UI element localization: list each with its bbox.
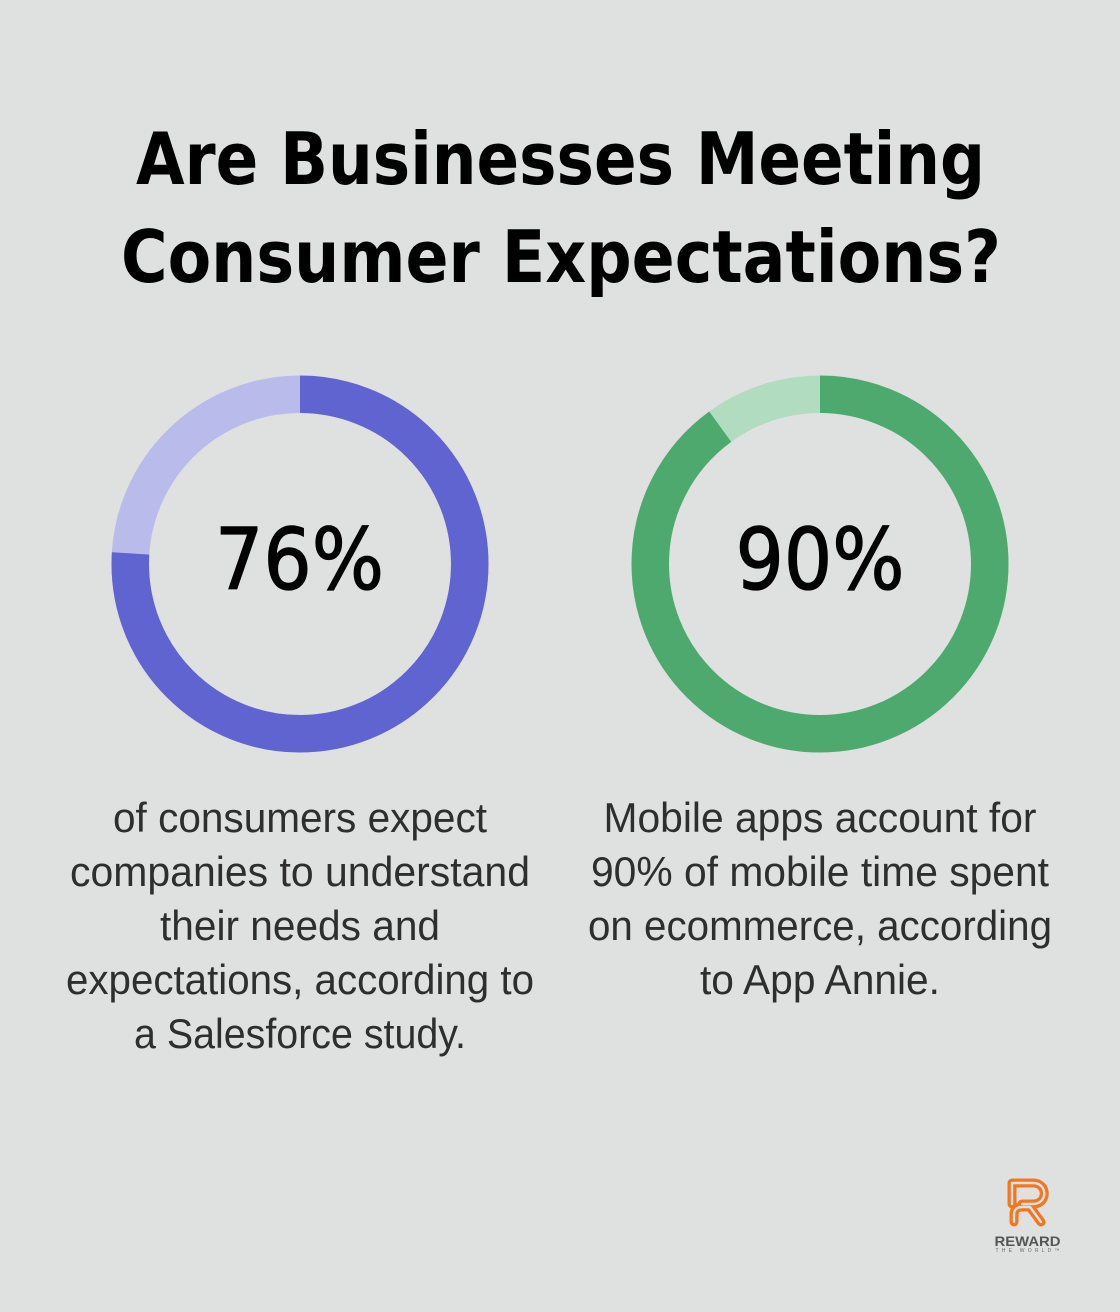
- title: [121, 117, 1001, 299]
- description: 76%: their needs and: [160, 902, 440, 949]
- donut chart: 90%: [650, 394, 990, 734]
- value: 90%: 90%: [736, 511, 904, 610]
- description: 90%: on ecommerce, according: [588, 902, 1052, 949]
- title: Consumer Expectations?: [121, 215, 1001, 299]
- description: 76%: companies to understand: [70, 848, 530, 895]
- title: Are Businesses Meeting: [136, 117, 985, 201]
- panel: 90% statistic: [588, 394, 1052, 1003]
- panel: 76% statistic: [66, 394, 534, 1057]
- value: 76%: 76%: [215, 511, 384, 610]
- description: 76%: a Salesforce study.: [134, 1010, 466, 1057]
- donut chart: 76%: [130, 394, 470, 734]
- description: 76%: of consumers expect: [113, 794, 487, 841]
- description: 90%: to App Annie.: [700, 956, 940, 1003]
- description: 76%: expectations, according to: [66, 956, 534, 1003]
- description: 90%: Mobile apps account for: [604, 794, 1037, 841]
- icon: orange R mark: [1012, 1183, 1044, 1222]
- logo wordmark: REWARD: [994, 1233, 1060, 1249]
- description: 76%: [66, 794, 534, 1057]
- description: 90%: [588, 794, 1052, 1003]
- description: 90%: 90% of mobile time spent: [591, 848, 1049, 895]
- logo tagline: THE WORLD™: [996, 1248, 1060, 1254]
- logo: Reward the World: [994, 1183, 1060, 1254]
